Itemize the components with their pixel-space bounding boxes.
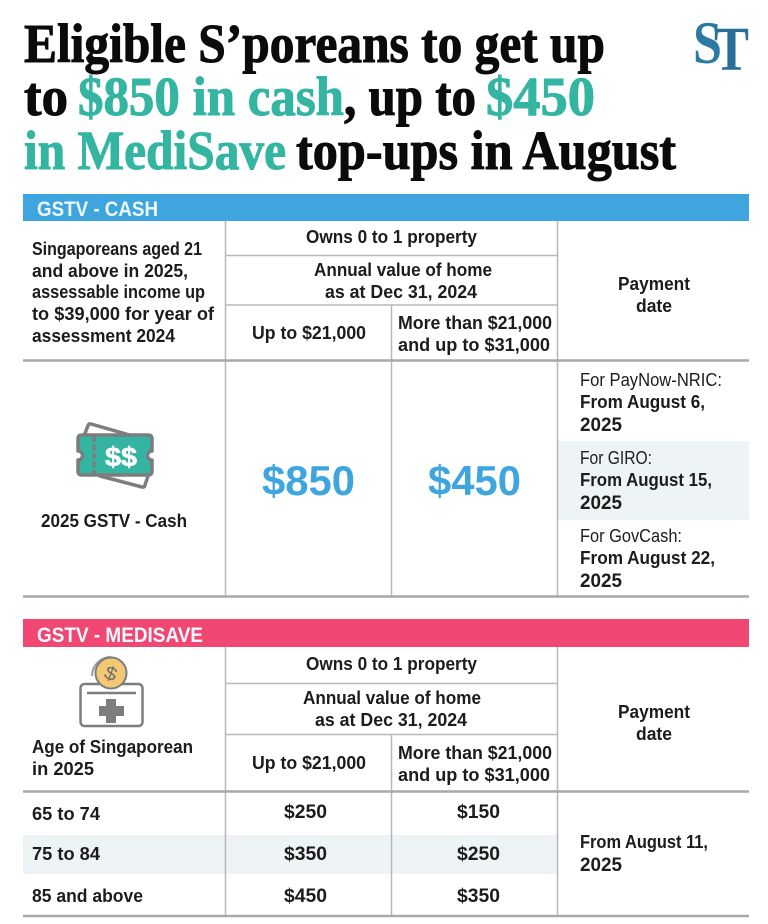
- highlighted GIRO band: [558, 441, 749, 520]
- icon: cash tickets: $$: [105, 442, 137, 472]
- MediSave table grid: [23, 647, 749, 916]
- eligibility text: assessment 2024: [32, 326, 175, 346]
- column headings: [252, 227, 690, 355]
- title: Eligible S’poreans to get up: [24, 13, 605, 74]
- title: , up to: [344, 66, 476, 127]
- title: top-ups in August: [296, 120, 677, 181]
- cash icon label: 2025 GSTV - Cash: [41, 511, 187, 531]
- column headings: as at Dec 31, 2024: [325, 282, 477, 302]
- title: $850 in cash: [78, 66, 344, 127]
- payment dates: From August 6,: [580, 392, 705, 412]
- panel: GSTV MediSave: [23, 619, 749, 916]
- column headings: Payment: [618, 274, 690, 294]
- column headings: Payment: [618, 702, 690, 722]
- column headings: More than $21,000: [398, 313, 552, 333]
- amount: $450: $450: [428, 457, 521, 504]
- logo: ST: S: [693, 10, 722, 76]
- payment dates: For GIRO:: [580, 448, 652, 468]
- row: 85 and above: [32, 886, 500, 907]
- age column heading: in 2025: [32, 759, 94, 779]
- row: 75 to 84: $350: [284, 844, 327, 865]
- title: [24, 13, 677, 181]
- GSTV cash header bar: GSTV - CASH: [37, 198, 158, 221]
- icon: cash tickets: [78, 424, 152, 487]
- column headings: and up to $31,000: [398, 765, 550, 785]
- highlighted row band: [23, 835, 557, 874]
- eligibility text: [32, 239, 215, 346]
- column headings: Annual value of home: [303, 688, 481, 708]
- icon: MediSave coin and box: $: [101, 662, 120, 686]
- logo: ST: T: [714, 16, 749, 84]
- payment dates: 2025: [580, 571, 622, 592]
- column headings: Owns 0 to 1 property: [306, 654, 477, 674]
- row: 75 to 84: [32, 844, 500, 865]
- cash table grid: [23, 221, 749, 596]
- row: 65 to 74: $150: [457, 802, 500, 823]
- column headings: Up to $21,000: [252, 753, 366, 773]
- column headings: date: [636, 296, 672, 316]
- row: 85 and above: $350: [457, 886, 500, 907]
- payment dates: For PayNow-NRIC:: [580, 370, 722, 390]
- row: 75 to 84: 75 to 84: [32, 844, 100, 864]
- row: 65 to 74: [32, 802, 500, 824]
- column headings: Up to $21,000: [252, 323, 366, 343]
- title: $450: [486, 66, 595, 127]
- row: 75 to 84: $250: [457, 844, 500, 865]
- column headings: as at Dec 31, 2024: [315, 710, 467, 730]
- eligibility text: to $39,000 for year of: [32, 304, 215, 324]
- payment dates: From August 22,: [580, 548, 715, 568]
- panel: GSTV cash: [23, 194, 749, 596]
- eligibility text: assessable income up: [32, 282, 205, 302]
- payment dates: From August 15,: [580, 470, 712, 490]
- payment dates: [580, 370, 722, 592]
- GSTV MediSave header bar: GSTV - MEDISAVE: [37, 624, 203, 647]
- row: 65 to 74: $250: [284, 802, 327, 823]
- column headings: More than $21,000: [398, 743, 552, 763]
- amount: $850: $850: [262, 457, 355, 504]
- MediSave payment date: From August 11,: [580, 832, 708, 852]
- payment dates: For GovCash:: [580, 526, 682, 546]
- MediSave payment date: 2025: [580, 855, 622, 876]
- GSTV cash header bar: [23, 194, 749, 221]
- row: 65 to 74: 65 to 74: [32, 804, 100, 824]
- MediSave payment date: [580, 832, 708, 876]
- eligibility text: Singaporeans aged 21: [32, 239, 202, 259]
- title: in MediSave: [24, 120, 286, 181]
- logo: ST: [693, 10, 749, 84]
- GSTV MediSave header bar: [23, 619, 749, 647]
- column headings: Owns 0 to 1 property: [306, 227, 477, 247]
- payment dates: 2025: [580, 415, 622, 436]
- column headings: [252, 654, 690, 785]
- eligibility text: and above in 2025,: [32, 261, 188, 281]
- age column heading: Age of Singaporean: [32, 737, 193, 757]
- row: 85 and above: 85 and above: [32, 886, 143, 906]
- icon: MediSave coin and box: [80, 657, 142, 726]
- column headings: Annual value of home: [314, 260, 492, 280]
- title: to: [24, 66, 68, 127]
- column headings: and up to $31,000: [398, 335, 550, 355]
- payment dates: 2025: [580, 493, 622, 514]
- row: 85 and above: $450: [284, 886, 327, 907]
- age column heading: [32, 737, 193, 779]
- column headings: date: [636, 724, 672, 744]
